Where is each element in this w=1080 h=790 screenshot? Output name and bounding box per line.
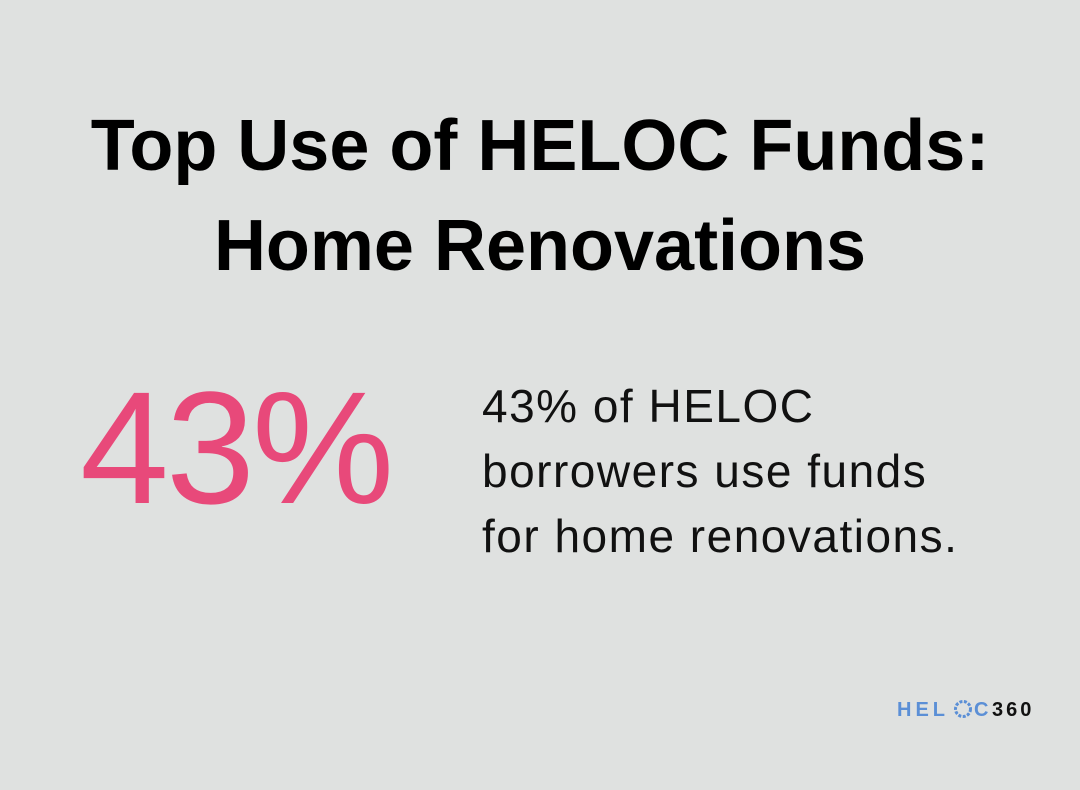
logo: C [974,699,988,721]
title: Home Renovations [214,206,866,286]
title [91,106,989,286]
description text: 43% of HELOC [482,380,814,432]
description text [482,380,958,562]
description text: borrowers use funds [482,445,927,497]
description text: for home renovations. [482,510,958,562]
logo [897,699,1034,721]
logo: 360 [992,699,1034,721]
big stat: 43% [80,358,391,537]
logo: HEL [897,699,949,721]
title: Top Use of HELOC Funds: [91,106,989,186]
